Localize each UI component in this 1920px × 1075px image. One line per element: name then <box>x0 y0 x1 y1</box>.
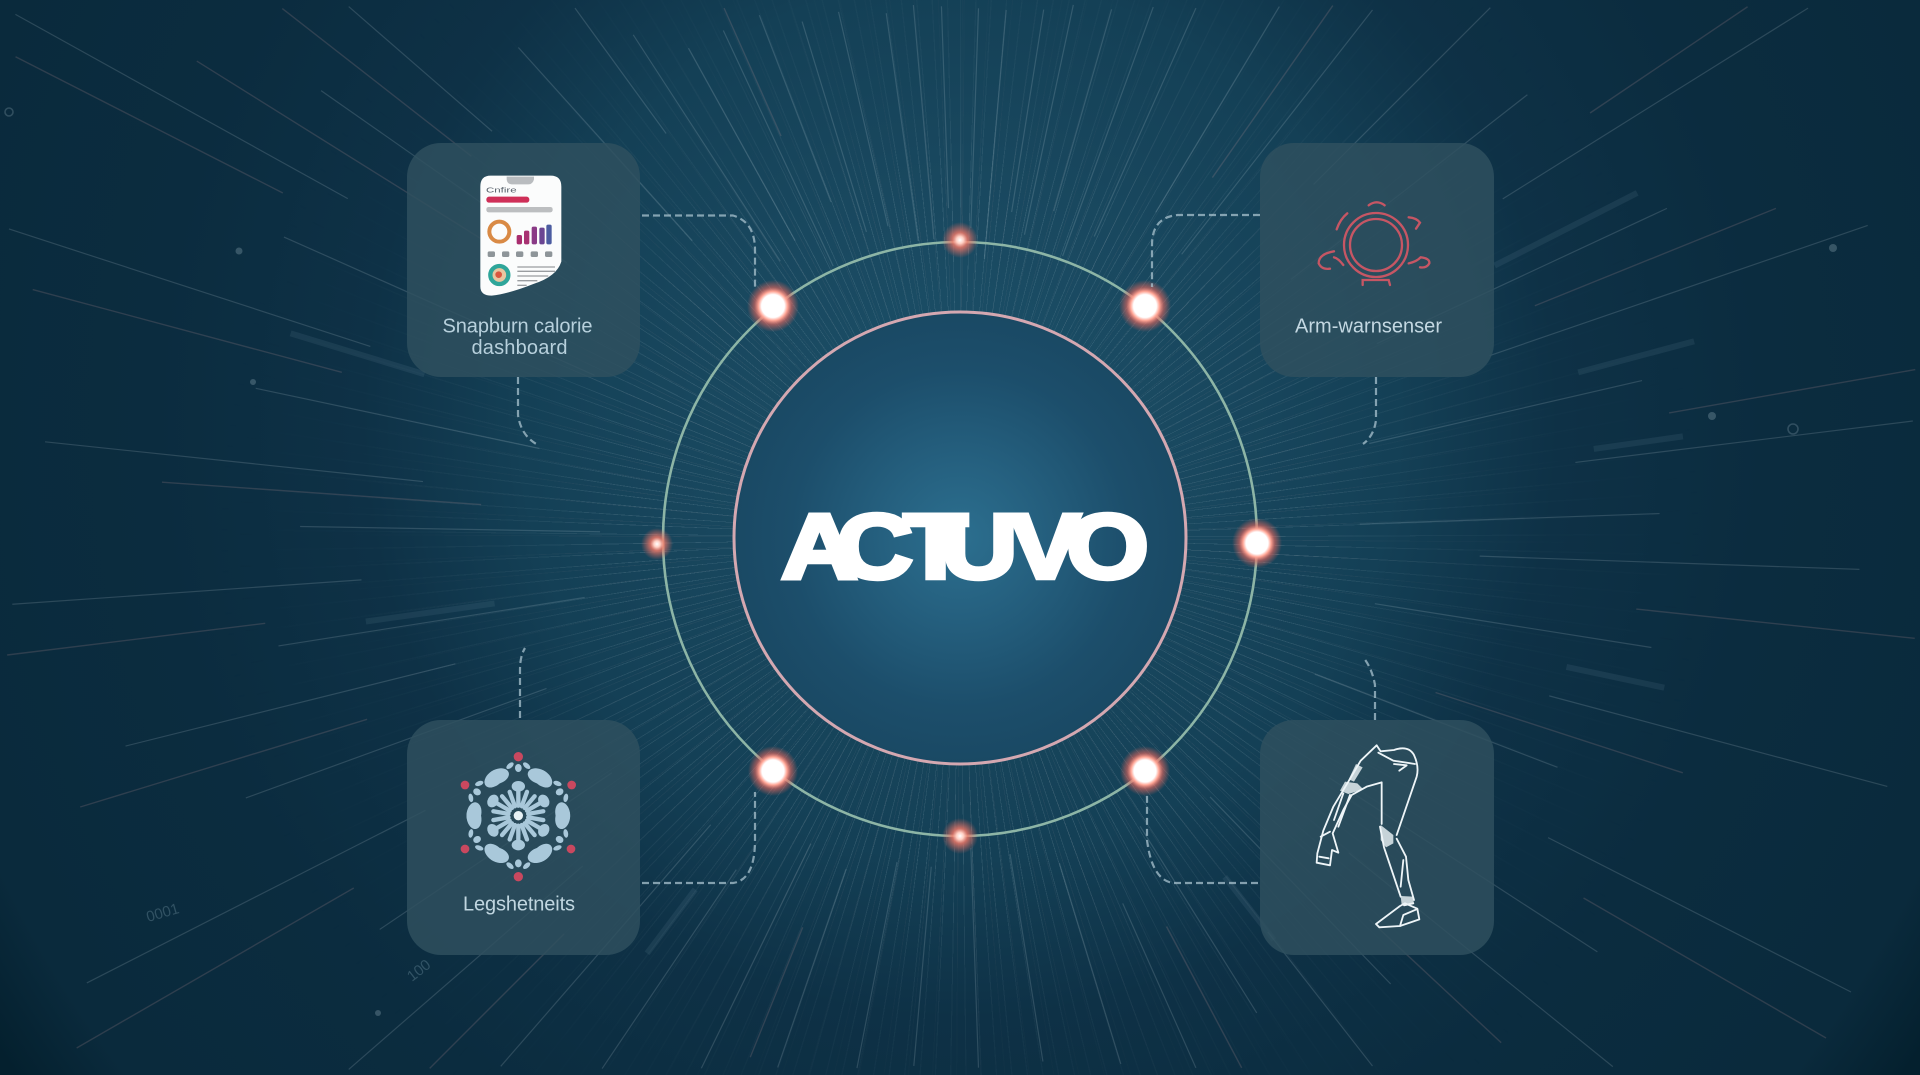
panel: leg and arm anatomy <box>1260 720 1494 955</box>
panel: snapburn calorie dashboard <box>407 143 640 377</box>
brand wordmark ACTUVO: ACTUVO <box>781 495 1149 598</box>
faint background digits: 100 <box>404 956 434 985</box>
icon: leg and arm line drawing <box>1317 745 1419 927</box>
faint background digits <box>144 900 434 985</box>
label: arm-warnsenser: Arm-warnsenser <box>1295 316 1442 338</box>
icon: phone dashboard <box>480 176 561 296</box>
dashed connectors <box>518 215 1376 883</box>
outer ring <box>663 242 1257 836</box>
label: snapburn calorie dashboard: dashboard <box>472 337 568 359</box>
ring nodes <box>641 222 1282 854</box>
icon: sensor ring <box>1319 202 1429 285</box>
label: legshetneits: Legshetneits <box>463 894 575 916</box>
panel: legshetneits <box>407 720 640 955</box>
faint background digits: 0001 <box>144 900 181 926</box>
panel: arm warm sensor <box>1260 143 1494 377</box>
central circle <box>734 312 1186 764</box>
icon: phone dashboard: Cnfire <box>486 186 517 195</box>
label: snapburn calorie dashboard: Snapburn calorie <box>442 316 592 338</box>
icon: snowflake mandala <box>452 752 584 881</box>
